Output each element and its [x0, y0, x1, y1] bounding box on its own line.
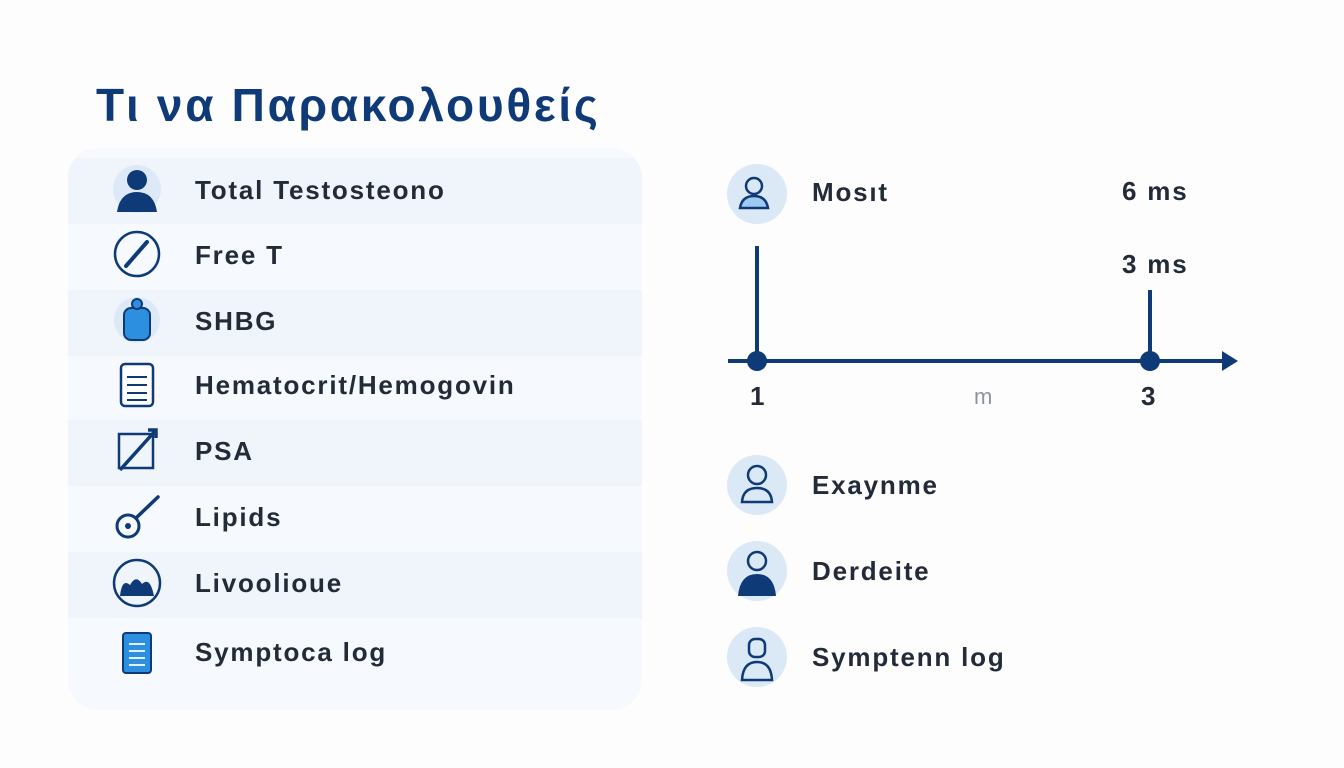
right list labels: Exaynme [812, 470, 939, 500]
item labels: Total Testosteono [195, 175, 446, 205]
text: Lipids [195, 502, 282, 532]
icon: pen circle [115, 232, 159, 276]
icon: key [117, 497, 158, 537]
text: 6 ms [1122, 176, 1188, 206]
icons left [112, 165, 162, 674]
text: Hematocrit/Hemogovin [195, 370, 516, 400]
icon: notepad [121, 364, 153, 406]
text: 3 ms [1122, 249, 1188, 279]
text: Symptenn log [812, 642, 1006, 672]
icon: person top [727, 164, 787, 224]
text: 1 [750, 381, 766, 411]
text: Derdeite [812, 556, 930, 586]
icon: person 3 [727, 541, 787, 601]
icon: person 2 [727, 455, 787, 515]
timeline chart [727, 164, 1238, 687]
text: SHBG [195, 306, 277, 336]
icon: person 4 [727, 627, 787, 687]
icon: clipboard [123, 633, 151, 673]
icon: psa box [119, 430, 156, 470]
text: m [974, 384, 992, 409]
icon: landscape circle [114, 560, 160, 606]
title: Τι να Παρακολουθείς [96, 79, 601, 131]
text: 3 [1141, 381, 1157, 411]
text: Livoolioue [195, 568, 343, 598]
text: PSA [195, 436, 254, 466]
timeline axis [728, 246, 1238, 371]
icon: person [113, 165, 161, 213]
panel: checklist [68, 148, 642, 710]
text: Free T [195, 240, 284, 270]
icon: bottle [114, 297, 160, 343]
text: Symptoca log [195, 637, 387, 667]
timeline labels: Mosıt [812, 177, 889, 207]
